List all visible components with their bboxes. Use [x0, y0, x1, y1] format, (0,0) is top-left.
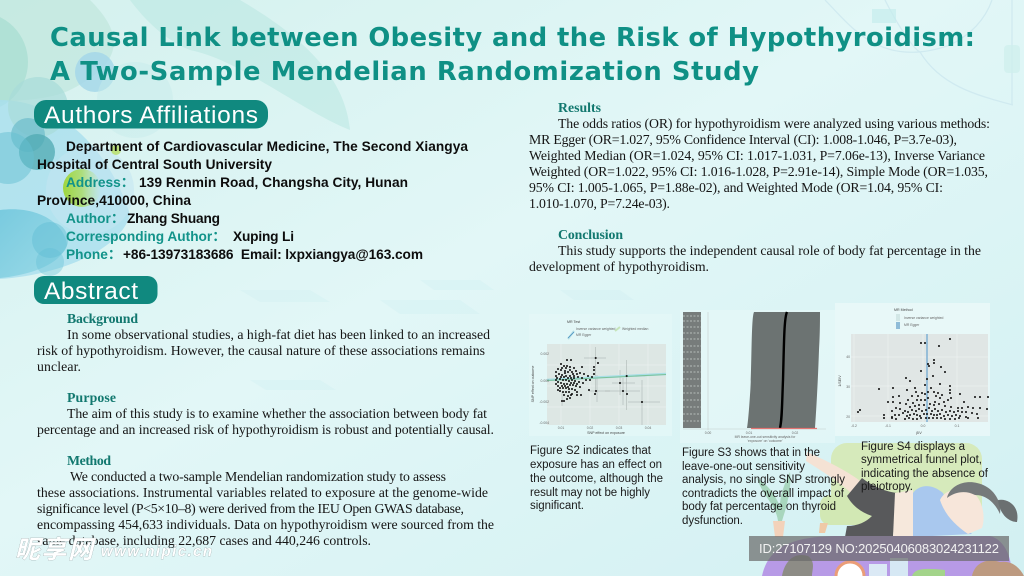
text block: method: Method	[67, 453, 111, 468]
chart: Figure S4 funnel plot: 0.0	[921, 424, 925, 428]
caption: Figure S3: body fat percentage on thyroid	[682, 501, 836, 513]
chart: Figure S2 scatter plot: 0.002	[540, 352, 549, 356]
chart: Figure S4 funnel plot: 40	[846, 355, 850, 359]
watermark: nipic logo	[15, 530, 212, 566]
chart: Figure S2 scatter plot: SNP effect on outcome	[531, 366, 535, 402]
text block: method: these associations. Instrumental variables related to exposure at the genome-wide	[37, 485, 488, 500]
chart: Figure S2 scatter plot: -0.004	[539, 421, 549, 425]
text block: authors affiliations: Province,410000, China	[37, 193, 191, 208]
chart: Figure S2 scatter plot: 0.03	[616, 426, 622, 430]
chart: Figure S2 scatter plot: SNP effect on exposure	[587, 431, 625, 435]
text block: method	[37, 453, 494, 548]
chart: Figure S2 scatter plot: -0.002	[539, 400, 549, 404]
chart: Figure S4 funnel plot: βIV	[916, 431, 922, 435]
text block: authors affiliations	[37, 139, 468, 262]
text block: authors affiliations: Hospital of Central South University	[37, 157, 272, 172]
text block: authors affiliations: Author：	[66, 211, 125, 226]
text block: results: Results	[558, 100, 602, 115]
text block: authors affiliations: Zhang Shuang	[127, 211, 220, 226]
watermark: image ID	[749, 536, 1009, 561]
text block: background	[37, 311, 490, 374]
heading: Abstract: Abstract	[44, 278, 138, 305]
chart: Figure S3 leave-one-out plot: MR leave-one-out sensitivity analysis for	[735, 435, 796, 439]
caption: Figure S2: the outcome, although the	[530, 473, 663, 485]
text block: method: encompassing 454,633 individuals. Data on hypothyroidism were sourced from the	[37, 517, 494, 532]
text block: method: We conducted a two-sample Mendelian randomization study to assess	[70, 469, 446, 484]
text block: results: Weighted (OR=1.022, 95% CI: 1.016-1.028, P=2.91e-14), Simple Mode (OR=1.035,	[529, 164, 988, 180]
chart: Figure S2 scatter plot	[529, 314, 672, 436]
legend: MR Test: MR Test	[567, 320, 580, 324]
text block: background: risk of hypothyroidism. However, the causal nature of these associations remains	[37, 343, 485, 358]
text block: results: MR Egger (OR=1.027, 95% Confidence Interval (CI): 1.008-1.046, P=3.7e-03),	[529, 132, 957, 148]
caption: Figure S3: dysfunction.	[682, 515, 743, 527]
legend: MR Test: Inverse variance weighted	[576, 327, 616, 331]
text block: authors affiliations: Corresponding Author：	[66, 229, 226, 244]
title: A Two-Sample Mendelian Randomization Study	[50, 57, 759, 87]
legend: MR Test: Weighted median	[622, 327, 648, 331]
legend: MR Method: MR Egger	[904, 323, 920, 327]
legend: MR Method: MR Method	[894, 308, 913, 312]
chart: Figure S4 funnel plot: 1/SEIV	[838, 375, 842, 387]
legend: MR Method	[894, 308, 944, 329]
caption: Figure S4: Figure S4 displays a	[861, 441, 966, 453]
text block: authors affiliations: Phone：	[66, 247, 122, 262]
chart: Figure S3 leave-one-out plot: 0.02	[792, 431, 798, 435]
legend: MR Method: Inverse variance weighted	[904, 316, 944, 320]
text block: results	[529, 100, 990, 212]
caption: Figure S2: result may not be highly	[530, 487, 650, 499]
illustration: woman resting on sofa	[757, 443, 1024, 576]
watermark: image ID: ID:27107129 NO:20250406083024231122	[759, 541, 999, 556]
text block: background: unclear.	[37, 359, 81, 374]
text block: method: same database, including 22,687 cases and 440,246 controls.	[37, 533, 371, 548]
caption: Figure S3: contradicts the overall impact of	[682, 488, 845, 500]
text block: authors affiliations: Xuping Li	[233, 229, 294, 244]
text block: background: Background	[67, 311, 138, 326]
text block: purpose: The aim of this study is to examine whether the association between body fat	[67, 406, 487, 421]
caption: Figure S3	[682, 447, 845, 527]
text block: authors affiliations: 139 Renmin Road, Changsha City, Hunan	[139, 175, 408, 190]
caption: Figure S2: exposure has an effect on	[530, 459, 662, 471]
chart: Figure S2 scatter plot: 0.02	[587, 426, 593, 430]
chart: Figure S4 funnel plot: 30	[846, 385, 850, 389]
text block: conclusion: Conclusion	[558, 227, 623, 242]
text block: conclusion	[529, 227, 981, 274]
chart: Figure S4 funnel plot: -0.2	[851, 424, 857, 428]
caption: Figure S4: symmetrical funnel plot,	[861, 454, 982, 466]
text block: background: In some observational studies, a high-fat diet has been linked to an increased	[67, 327, 490, 342]
text block: purpose: Purpose	[67, 390, 116, 405]
watermark: nipic logo: www.nipic.cn	[101, 543, 212, 560]
text block: authors affiliations: +86-13973183686 Email: lxpxiangya@163.com	[123, 247, 423, 262]
caption: Figure S4	[861, 441, 989, 493]
legend: MR Test: MR Egger	[576, 333, 592, 337]
text block: purpose	[37, 390, 494, 437]
caption: Figure S2: significant.	[530, 500, 584, 512]
heading: Authors Affiliations: Authors Affiliations	[44, 102, 258, 129]
legend: MR Test	[567, 320, 648, 339]
chart: Figure S2 scatter plot: 0.04	[645, 426, 651, 430]
text block: authors affiliations: Address：	[66, 175, 134, 190]
text block: results: 95% CI: 1.005-1.065, P=1.88e-02), and Weighted Mode (OR=1.04, 95% CI:	[529, 180, 943, 196]
chart: Figure S4 funnel plot: 20	[846, 415, 850, 419]
text block: results: The odds ratios (OR) for hypothyroidism were analyzed using various methods:	[558, 116, 990, 132]
text block: conclusion: This study supports the independent causal role of body fat percentage in the	[558, 243, 981, 258]
chart: Figure S3 leave-one-out plot: 'exposure' on 'outcome'	[747, 439, 783, 443]
chart: Figure S4 funnel plot: 0.1	[955, 424, 959, 428]
text block: conclusion: development of hypothyroidism.	[529, 259, 709, 274]
caption: Figure S4: indicating the absence of	[861, 468, 989, 480]
text block: results: 1.010-1.070, P=7.24e-03).	[529, 196, 670, 212]
chart: Figure S3 leave-one-out plot	[680, 310, 835, 443]
title	[50, 23, 975, 87]
chart: Figure S3 leave-one-out plot: 0.01	[746, 431, 752, 435]
caption: Figure S2: Figure S2 indicates that	[530, 445, 652, 457]
chart: Figure S4 funnel plot	[835, 303, 990, 436]
text block: results: Weighted Median (OR=1.024, 95% CI: 1.017-1.031, P=7.06e-13), Inverse Variance	[529, 148, 985, 164]
title: Causal Link between Obesity and the Risk of Hypothyroidism:	[50, 23, 975, 53]
caption: Figure S4: pleiotropy.	[861, 481, 913, 493]
chart: Figure S2 scatter plot: 0.01	[558, 426, 564, 430]
caption: Figure S2	[530, 445, 663, 512]
caption: Figure S3: leave-one-out sensitivity	[682, 461, 805, 473]
chart: Figure S4 funnel plot: -0.1	[885, 424, 891, 428]
text block: authors affiliations: Department of Cardiovascular Medicine, The Second Xiangya	[66, 139, 468, 154]
text block: purpose: percentage and an increased risk of hypothyroidism is robust and potentially causal.	[37, 422, 494, 437]
watermark: nipic logo: 昵享网	[15, 530, 97, 566]
caption: Figure S3: Figure S3 shows that in the	[682, 447, 820, 459]
chart: Figure S3 leave-one-out plot: 0.00	[705, 431, 711, 435]
caption: Figure S3: analysis, no single SNP strongly	[682, 474, 845, 486]
chart: Figure S2 scatter plot: 0.000	[540, 379, 549, 383]
text block: method: significance level (P<5×10–8) were derived from the IEU Open GWAS database,	[37, 501, 464, 517]
